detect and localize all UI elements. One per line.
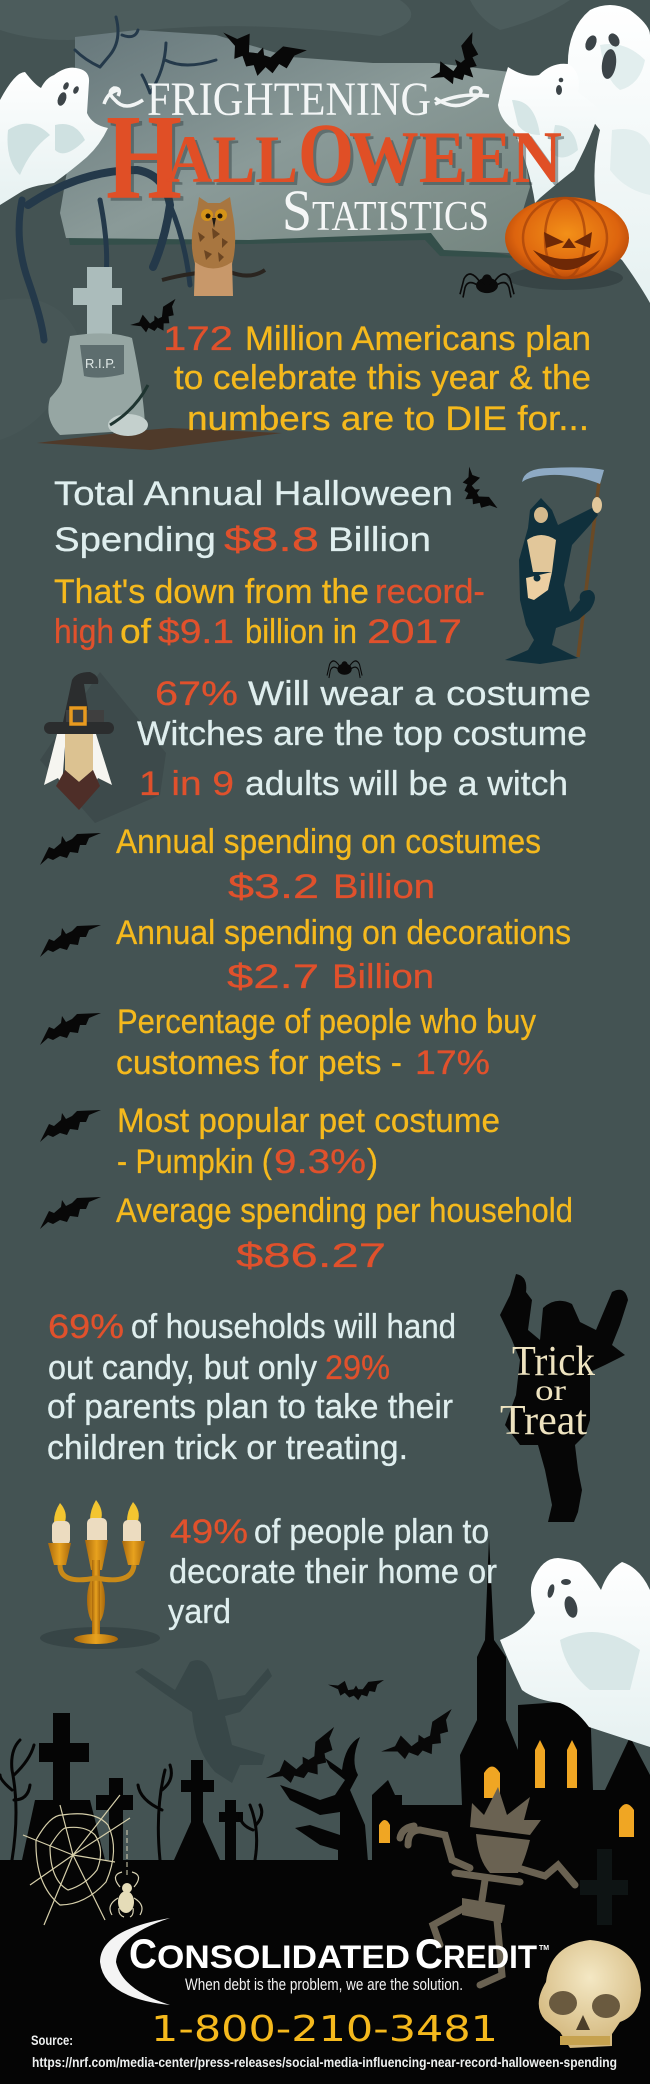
pelvis [526, 572, 552, 600]
castle windows [379, 1740, 634, 1843]
bat above the witch [328, 1680, 384, 1700]
gravestone [37, 267, 282, 450]
record-high text: $9.1 [158, 613, 234, 651]
pelvis [462, 1898, 505, 1923]
total spending text [54, 475, 453, 559]
bat by the reaper [453, 464, 497, 520]
title line three: S [282, 178, 312, 243]
ghosts right [498, 5, 650, 303]
ghost face [546, 1579, 580, 1619]
stat: costumes: Annual spending on costumes [116, 823, 541, 861]
cloak [505, 498, 598, 664]
stat: popular pet costume [40, 1102, 500, 1181]
left flourish [104, 88, 143, 106]
intro text: 172 [163, 320, 233, 358]
costume text: adults will be a witch [245, 765, 568, 803]
crescent [100, 1918, 170, 2005]
stat: household spending: $86.27 [236, 1237, 386, 1275]
intro text: Million Americans plan [245, 320, 591, 358]
title line two [106, 90, 562, 225]
candy text: out candy, but only [48, 1349, 317, 1387]
brand name: TM [539, 1945, 549, 1952]
total spending text: $8.8 [224, 521, 319, 559]
brand name: REDIT [443, 1939, 537, 1975]
dirt mound [37, 428, 282, 450]
phone number: 1-800-210-3481 [151, 2009, 498, 2050]
stone title plaque [60, 30, 530, 258]
stat: household spending: Average spending per household [116, 1192, 573, 1230]
plaque text: R.I.P. [85, 356, 116, 371]
candy text: 29% [325, 1349, 390, 1387]
rock and vine [108, 414, 148, 436]
owl on branch [162, 197, 265, 296]
candelabra [40, 1500, 160, 1649]
skull [539, 1940, 641, 2048]
bat top centre [214, 24, 307, 88]
brand name: ONSOLIDATED [157, 1939, 410, 1975]
trick or treat lettering: Treat [500, 1398, 587, 1444]
candy text: children trick or treating. [47, 1429, 408, 1467]
stat: decorations: $2.7 [227, 958, 319, 996]
hand [592, 497, 602, 513]
skull face [534, 507, 548, 523]
title line three: TATISTICS [312, 194, 489, 240]
total spending text: Billion [328, 521, 431, 559]
candy text: 69% [48, 1308, 124, 1346]
decorate text [168, 1513, 497, 1631]
big ghost face [583, 31, 622, 80]
grim reaper [505, 467, 604, 664]
title line three [282, 178, 489, 243]
costume text: Witches are the top costume [137, 715, 587, 753]
record-high text: 2017 [367, 613, 462, 651]
dim grave cross [580, 1849, 628, 1925]
witch icon [40, 672, 166, 823]
title line two: ALL [166, 121, 298, 197]
title line two shadow: H [109, 93, 185, 228]
trick or treat silhouette [500, 1274, 628, 1522]
left ghost face [56, 81, 80, 107]
tagline: When debt is the problem, we are the solution. [185, 1975, 463, 1994]
Consolidated Credit logo [100, 1918, 549, 2005]
arms and legs [400, 1826, 575, 1985]
bat bullet [40, 925, 101, 957]
stat: pet costumes [40, 1003, 536, 1082]
stat: pet costumes: 17% [415, 1044, 490, 1082]
title line two: WEEN [349, 117, 562, 199]
stat: popular pet costume: 9.3% [274, 1143, 366, 1181]
intro text: numbers are to DIE for... [187, 400, 589, 438]
witch silhouette [280, 1737, 368, 1862]
title line two shadow: WEEN [352, 120, 565, 202]
stone [48, 333, 145, 435]
skull [476, 1834, 530, 1873]
pumpkin [505, 197, 629, 290]
right flourish [435, 88, 489, 106]
bat bullet [40, 1013, 101, 1045]
costume text: 67% [155, 675, 238, 713]
big ghost [568, 5, 650, 303]
title line two: O [298, 105, 354, 201]
stat: household spending [40, 1192, 573, 1275]
stat: decorations: Annual spending on decorations [116, 914, 571, 952]
total spending text: Spending [54, 521, 216, 559]
spider web [23, 1795, 130, 1925]
stat: popular pet costume: Most popular pet costume [117, 1102, 500, 1140]
ground [0, 1860, 650, 2084]
bat left of witch [262, 1727, 351, 1799]
total spending text: Total Annual Halloween [54, 475, 453, 513]
bat beside gravestone [128, 299, 185, 342]
trick or treat lettering: Trick [512, 1339, 595, 1385]
large cross [22, 1713, 105, 1860]
dead tree over the plaque [19, 17, 216, 340]
brand name: C [129, 1930, 157, 1977]
candy text: of parents plan to take their [47, 1388, 453, 1426]
stat: decorations: Billion [332, 958, 434, 996]
title line two shadow: ALL [169, 124, 301, 200]
candles [52, 1518, 141, 1546]
small cross [96, 1778, 133, 1860]
bare trees [0, 1740, 262, 1860]
decorate text: 49% [170, 1513, 248, 1551]
candy text [47, 1308, 456, 1467]
hanging spider [110, 1830, 142, 1917]
bat bullet [40, 833, 101, 865]
intro text: to celebrate this year & the [174, 359, 591, 397]
small ghost face [556, 78, 563, 95]
small ghost [498, 64, 600, 203]
ribs [527, 535, 556, 572]
pumpkin face [533, 232, 600, 270]
centre cross [174, 1760, 220, 1860]
background clouds [0, 0, 570, 440]
title line two shadow: O [301, 108, 357, 204]
trick or treat lettering [500, 1339, 595, 1444]
dancing skeleton [400, 1787, 575, 1985]
bat bullet [40, 1197, 101, 1229]
intro text [163, 320, 591, 438]
record-high text: of [120, 613, 152, 651]
title line two: H [106, 90, 182, 225]
decorate text: of people plan to [254, 1513, 489, 1551]
ghost bottom right [500, 1558, 650, 1747]
title line one: FRIGHTENING [147, 73, 431, 126]
crown [470, 1787, 541, 1835]
costume text: Will wear a costume [248, 675, 591, 713]
record-high text [54, 573, 485, 651]
decorate text: decorate their home or [169, 1553, 497, 1591]
bat top right [425, 32, 495, 99]
brass stand [48, 1540, 145, 1644]
record-high text: high [54, 613, 114, 651]
record-high text: billion in [245, 613, 357, 651]
stat: costumes: Billion [333, 868, 435, 906]
record-high text: That's down from the [54, 573, 369, 611]
bat bullet [40, 1110, 101, 1142]
hat buckle [71, 708, 85, 724]
stat: popular pet costume: - Pumpkin ( [117, 1143, 273, 1181]
stat: decorations [40, 914, 571, 996]
costume text: 1 in 9 [139, 765, 234, 803]
hair [44, 734, 112, 785]
flames [54, 1500, 139, 1522]
bat right of witch [378, 1709, 466, 1773]
source label: Source: [31, 2032, 73, 2048]
graveyard silhouette [0, 1537, 650, 2084]
face [65, 734, 93, 782]
stat: costumes [40, 823, 541, 906]
brand name [129, 1930, 549, 1977]
stat: popular pet costume: ) [367, 1143, 378, 1181]
brand name: C [415, 1930, 443, 1977]
scythe handle [578, 482, 599, 657]
title line two shadow [109, 93, 565, 228]
cloak [56, 770, 100, 810]
stat: pet costumes: customes for pets - [116, 1044, 402, 1082]
trick or treat lettering: or [535, 1374, 566, 1407]
candy text: of households will hand [131, 1308, 456, 1346]
cross [73, 267, 122, 336]
faded ghost silhouette [135, 1660, 272, 1783]
title [104, 73, 565, 243]
ghost left [0, 68, 108, 205]
small spider [327, 661, 362, 678]
stat: costumes: $3.2 [228, 868, 319, 906]
spider by the pumpkin [460, 274, 514, 298]
stat: pet costumes: Percentage of people who buy [117, 1003, 536, 1041]
record-high text: record- [375, 573, 485, 611]
castle [372, 1537, 650, 1860]
right cross [219, 1800, 243, 1860]
decorate text: yard [168, 1593, 231, 1631]
costume text [137, 675, 591, 803]
scythe blade [522, 467, 604, 484]
